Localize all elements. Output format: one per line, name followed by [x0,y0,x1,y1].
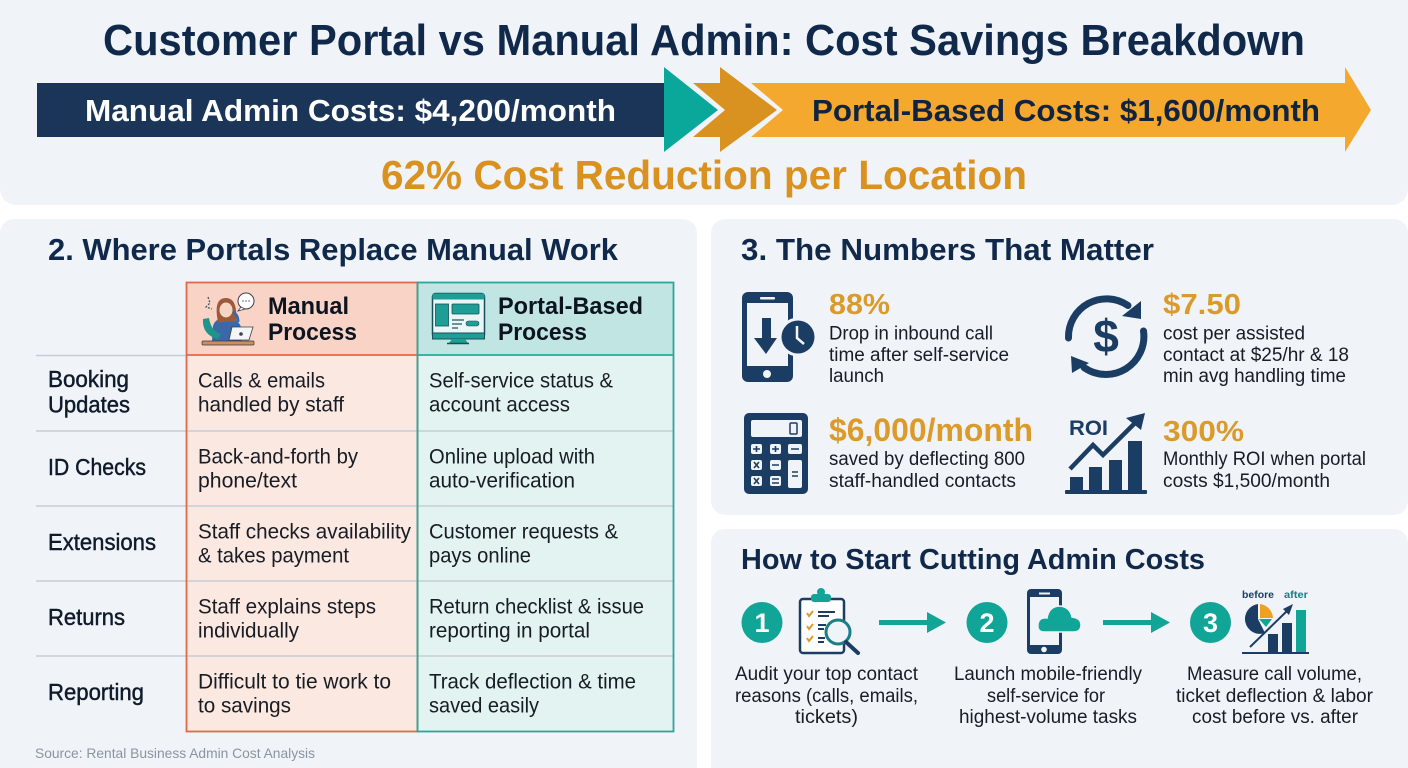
row: reporting: saved easily [429,694,539,718]
stat: $6,000/month: $6,000/month [829,412,1033,448]
icon: agent on phone with laptop [202,293,254,345]
header: manual process [268,293,357,346]
header: portal-based process: Process [498,319,587,346]
stat: 300%: 300% [1163,416,1244,448]
header: manual process: Manual [268,293,349,320]
row: extensions: Extensions [48,529,156,555]
row: booking updates: Booking [48,366,129,392]
icon: before and after chart [1242,589,1309,654]
stat: 300% [1163,416,1366,492]
heading: How to Start Cutting Admin Costs [741,544,1205,576]
step 1 text [735,664,919,728]
step 2 text: highest-volume tasks [959,707,1137,728]
stat: $7.50: cost per assisted [1163,324,1305,344]
row: reporting: Reporting [48,679,144,705]
row: ID checks: phone/text [198,470,297,492]
row: extensions [48,520,618,568]
icon: dollar cycle [1068,299,1144,374]
stat: $7.50: min avg handling time [1163,366,1346,387]
step 3 text: ticket deflection & labor [1176,686,1374,707]
row: ID checks [48,446,595,492]
header: manual process: Process [268,319,357,346]
row: booking updates [48,366,613,418]
arrow: step 1 to 2 [879,612,946,633]
comparison table [36,282,674,732]
step 1 text: Audit your top contact [735,664,919,685]
row: booking updates: handled by staff [198,394,344,416]
row: ID checks: ID Checks [48,454,146,480]
stat: 88%: time after self-service [829,345,1009,366]
stat: 88%: launch [829,366,884,387]
panel: how to start cutting admin costs [711,529,1408,768]
stat: 300%: Monthly ROI when portal [1163,449,1366,470]
stat: 88%: 88% [829,289,890,321]
step 2 badge [966,602,1008,643]
row: extensions: Staff checks availability [198,520,411,544]
row: reporting: to savings [198,694,291,718]
arrow: manual admin costs [37,83,665,137]
icon: ROI growth chart: ROI [1069,417,1108,440]
step 1 badge: 1 [754,608,770,638]
icon: ROI growth chart [1065,413,1147,494]
row: returns: reporting in portal [429,620,590,642]
step 2 text [954,664,1142,728]
icon: phone with cloud [1027,589,1081,654]
panel: where portals replace manual work [0,219,697,768]
step 3 text: cost before vs. after [1192,707,1359,728]
arrow: teal transition [664,67,718,152]
panel: the numbers that matter [711,219,1408,515]
icon: dollar cycle: $ [1093,310,1119,362]
arrow: orange transition chevron [693,67,777,152]
column: manual process fill [186,282,417,731]
source note: Source: Rental Business Admin Cost Analysis [35,745,315,761]
panel: cost comparison header [0,0,1408,205]
column: portal process fill [417,282,674,731]
stat: $7.50 [1163,289,1349,387]
header: portal-based process: Portal-Based [498,293,643,320]
title: Customer Portal vs Manual Admin: Cost Savings Breakdown [103,16,1305,65]
step 3 text [1176,664,1374,728]
arrow: step 2 to 3 [1103,612,1170,633]
row: returns: Returns [48,604,125,630]
row: extensions: Customer requests & [429,520,618,544]
row: extensions: & takes payment [198,544,349,568]
row: returns [48,596,644,642]
row: extensions: pays online [429,544,531,568]
row: booking updates: Updates [48,392,130,418]
row: returns: individually [198,620,299,642]
stat: 88%: Drop in inbound call [829,324,993,344]
arrow: manual admin costs: Manual Admin Costs: $4,200/month [85,93,616,128]
row: returns: Return checklist & issue [429,596,644,618]
row: booking updates: account access [429,394,570,416]
icon: portal on monitor [432,294,484,344]
stat: $6,000/month: staff-handled contacts [829,471,1016,492]
icon: before and after chart: before [1242,589,1274,601]
row: returns: Staff explains steps [198,596,376,618]
icon: phone with clock [742,292,818,382]
row: reporting [48,670,636,718]
stat: 88% [829,289,1009,387]
step 1 text: reasons (calls, emails, [735,686,918,707]
row: ID checks: Online upload with [429,446,595,468]
step 2 text: Launch mobile-friendly [954,664,1142,685]
stat: $7.50: $7.50 [1163,289,1241,321]
row: booking updates: Self-service status & [429,370,613,392]
stat: $7.50: contact at $25/hr & 18 [1163,345,1349,366]
row: reporting: Difficult to tie work to [198,670,391,694]
step 1 text: tickets) [795,707,858,728]
heading: 3. The Numbers That Matter [741,232,1154,267]
step 2 text: self-service for [987,686,1106,707]
header: portal-based process [498,293,643,346]
row: booking updates: Calls & emails [198,370,325,392]
icon: clipboard and magnifier [800,588,858,653]
stat: 300%: costs $1,500/month [1163,471,1330,492]
heading: 2. Where Portals Replace Manual Work [48,232,619,267]
step 3 badge [1190,602,1231,643]
headline: cost reduction: 62% Cost Reduction per Location [381,152,1027,198]
step 2 badge: 2 [979,608,995,638]
arrow: portal-based costs: Portal-Based Costs: $1,600/month [812,93,1320,128]
row: ID checks: auto-verification [429,470,575,492]
stat: $6,000/month: saved by deflecting 800 [829,449,1025,470]
step 3 text: Measure call volume, [1187,664,1362,685]
row: reporting: Track deflection & time [429,670,636,694]
stat: $6,000/month [829,412,1033,492]
icon: before and after chart: after [1284,589,1308,601]
step 1 badge [742,602,782,643]
row: ID checks: Back-and-forth by [198,446,358,468]
arrow: portal-based costs [751,67,1371,152]
step 3 badge: 3 [1203,608,1218,638]
icon: calculator [744,413,808,494]
